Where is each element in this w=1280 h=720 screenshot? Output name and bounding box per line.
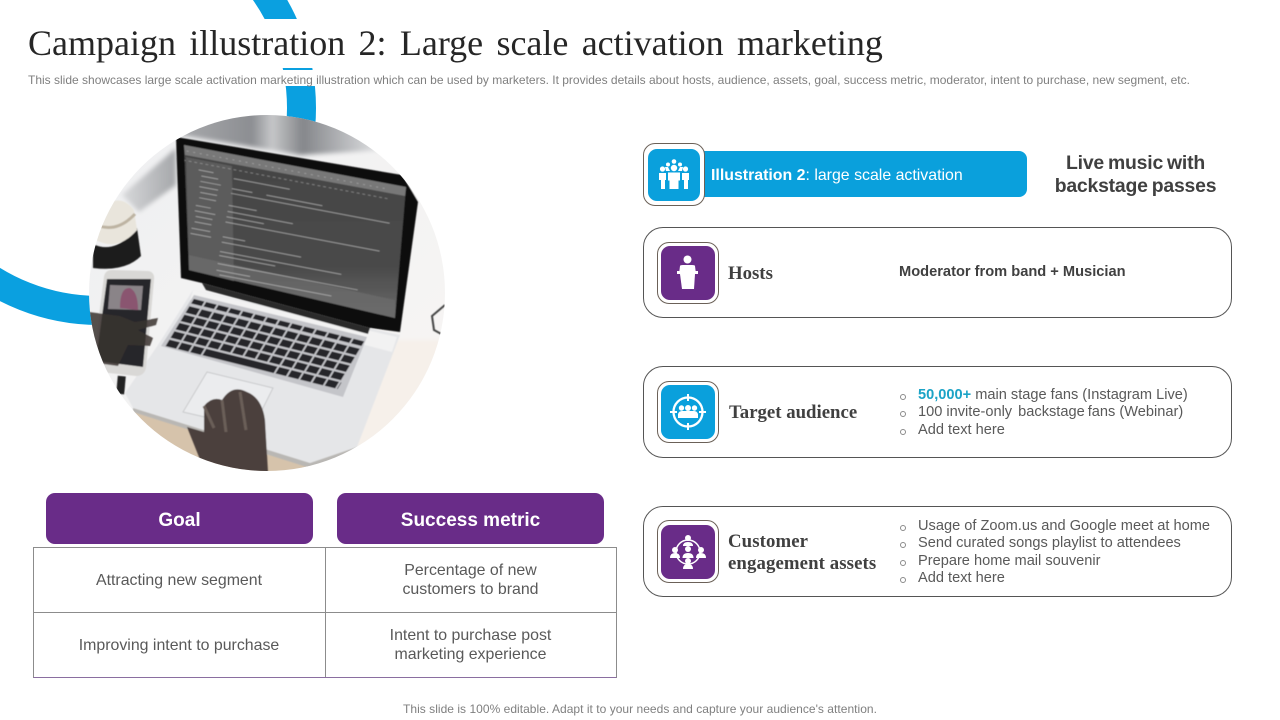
icon: group of people bbox=[659, 159, 689, 189]
goal and metric table bbox=[33, 547, 617, 678]
keyboard bbox=[161, 295, 367, 397]
subtitle: This slide showcases large scale activation marketing illustration which can be used by marketers. It provides details about hosts, audience, assets, goal, success metric, moderator, intent to purchase, new segment, etc. bbox=[28, 73, 1190, 87]
footer note: This slide is 100% editable. Adapt it to your needs and capture your audience's attention. bbox=[403, 702, 877, 716]
goal header: Goal bbox=[158, 510, 201, 531]
customer engagement list: Usage of Zoom.us and Google meet at home bbox=[918, 518, 1210, 534]
banner label: Illustration 2: large scale activation bbox=[711, 167, 963, 184]
customer engagement list: Add text here bbox=[918, 570, 1005, 586]
title: Campaign illustration 2: Large scale activation marketing bbox=[28, 23, 883, 63]
banner side heading: Live music with bbox=[1066, 152, 1205, 174]
target audience list: 50,000+ main stage fans (Instagram Live) bbox=[918, 386, 1188, 402]
trackpad bbox=[182, 372, 274, 418]
hand bbox=[187, 389, 268, 472]
coffee cup bbox=[93, 228, 141, 269]
photo: laptop on desk in circle bbox=[89, 115, 445, 471]
table cell: metric 2 bbox=[390, 627, 552, 663]
glasses bbox=[432, 305, 445, 336]
icon: speaker at podium bbox=[657, 242, 719, 304]
success metric header bbox=[337, 493, 604, 544]
banner side heading bbox=[1055, 152, 1216, 197]
customer engagement heading: Customer bbox=[728, 531, 808, 552]
customer engagement list: Send curated songs playlist to attendees bbox=[918, 535, 1181, 551]
smartphone bbox=[93, 270, 154, 376]
screen bbox=[176, 137, 418, 332]
customer engagement heading bbox=[728, 531, 876, 574]
hosts detail: Moderator from band + Musician bbox=[899, 264, 1126, 280]
table cell: goal 2: Improving intent to purchase bbox=[79, 637, 279, 654]
table cell: metric 1: Percentage of new bbox=[404, 562, 537, 579]
table cell: metric 1: customers to brand bbox=[402, 581, 539, 598]
customer engagement heading: engagement assets bbox=[728, 553, 876, 574]
icon: target audience bbox=[657, 381, 719, 443]
table cell: metric 2: Intent to purchase post bbox=[390, 627, 551, 644]
decorative blue arc bbox=[0, 0, 316, 325]
customer engagement list bbox=[900, 518, 1210, 586]
panel: hosts bbox=[643, 227, 1232, 318]
banner side heading: backstage passes bbox=[1055, 175, 1216, 197]
panel: customer engagement assets bbox=[643, 506, 1232, 597]
hosts heading: Hosts bbox=[728, 263, 773, 284]
target audience heading: Target audience bbox=[729, 402, 857, 423]
goal header bbox=[46, 493, 313, 544]
table cell: metric 1 bbox=[402, 562, 539, 598]
target audience list: Add text here bbox=[918, 422, 1005, 438]
target audience list bbox=[900, 386, 1188, 438]
table cell: goal 1: Attracting new segment bbox=[96, 572, 262, 589]
laptop base bbox=[125, 290, 400, 463]
panel: target audience bbox=[643, 366, 1232, 458]
success metric header: Success metric bbox=[401, 510, 540, 531]
icon: connected people bbox=[657, 520, 719, 583]
table cell: metric 2: marketing experience bbox=[395, 646, 546, 663]
target audience list: 100 invite-only backstage fans (Webinar) bbox=[918, 404, 1183, 420]
illustration banner bbox=[643, 143, 1027, 206]
customer engagement list: Prepare home mail souvenir bbox=[918, 552, 1101, 568]
